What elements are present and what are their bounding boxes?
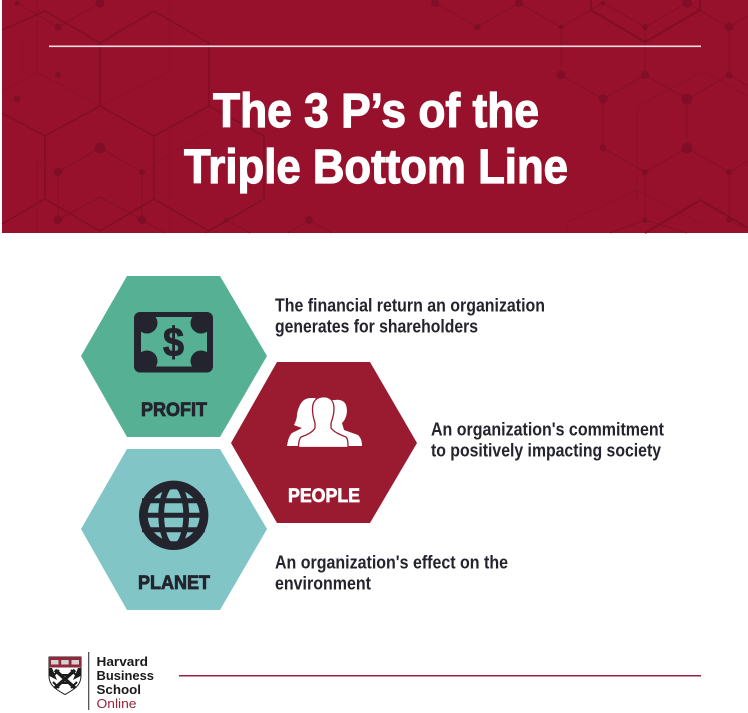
title: Triple Bottom Line — [184, 141, 568, 194]
logo wordmark: Harvard — [96, 654, 148, 669]
icon: banknote with dollar sign: $ — [163, 319, 184, 365]
label: profit: PROFIT — [141, 399, 207, 421]
description: people: to positively impacting society — [431, 440, 661, 460]
description: people: An organization's commitment — [431, 420, 664, 440]
description: planet: environment — [275, 574, 371, 594]
icon: banknote with dollar sign — [134, 312, 213, 372]
icon: HBS shield — [49, 657, 81, 694]
label: people: PEOPLE — [288, 485, 360, 507]
hexagon: people — [231, 362, 417, 523]
header banner — [2, 0, 748, 233]
description: profit — [275, 296, 545, 336]
description: planet — [275, 552, 508, 594]
logo divider — [88, 652, 89, 710]
title: The 3 P’s of the — [213, 85, 539, 138]
footer rule — [179, 675, 701, 676]
description: people — [431, 420, 664, 460]
description: profit: generates for shareholders — [275, 316, 478, 336]
hexagon: profit — [81, 276, 267, 437]
title — [184, 85, 568, 194]
hexagon: planet — [81, 449, 267, 610]
logo wordmark: Online — [96, 696, 136, 711]
icon: three people — [287, 397, 362, 448]
logo: Harvard Business School Online — [49, 652, 154, 711]
logo wordmark — [96, 654, 154, 711]
label: planet: PLANET — [138, 572, 210, 594]
header rule — [49, 46, 701, 47]
logo wordmark: Business — [96, 668, 154, 683]
description: planet: An organization's effect on the — [275, 552, 508, 572]
icon: globe — [139, 481, 208, 550]
description: profit: The financial return an organization — [275, 296, 545, 316]
logo wordmark: School — [96, 682, 141, 697]
